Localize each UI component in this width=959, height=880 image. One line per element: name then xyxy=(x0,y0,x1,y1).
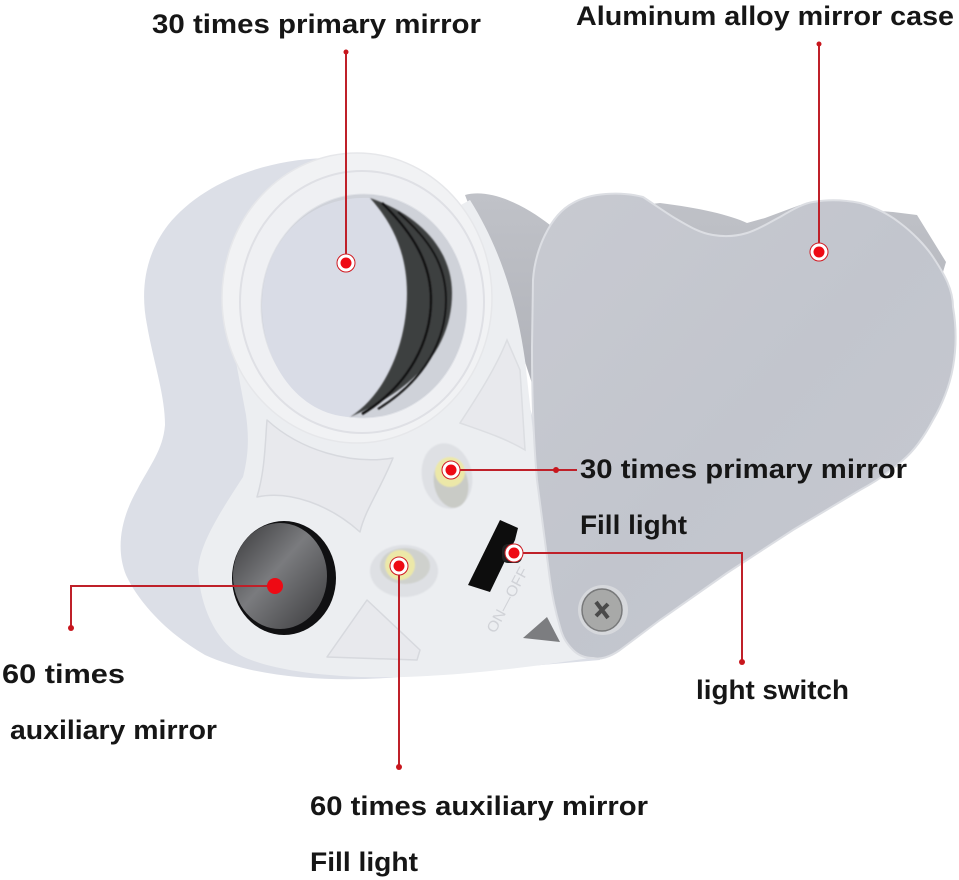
callout: 30 times primary mirror: 30 times primary mirror xyxy=(152,9,482,39)
callout: 60 times auxiliary mirror fill light: Fill light xyxy=(310,847,418,877)
callout: 30 times primary mirror fill light xyxy=(442,454,908,540)
small lens xyxy=(232,521,336,635)
ON OFF marking: ON—OFF xyxy=(484,564,532,636)
callout: light switch: light switch xyxy=(696,675,849,705)
switch knob xyxy=(502,544,522,563)
icon: magnifier xyxy=(121,153,956,679)
lens opening xyxy=(261,194,467,418)
dark barrel crescent xyxy=(350,198,452,417)
callout: 30 times primary mirror fill light: Fill light xyxy=(580,510,687,540)
back plate and case hinge xyxy=(465,193,946,470)
callout: light switch xyxy=(505,544,849,705)
LED lower xyxy=(370,545,438,597)
raised panels xyxy=(257,420,393,532)
side lobes of the body xyxy=(121,158,600,679)
callout: aluminum alloy mirror case xyxy=(576,1,954,261)
screw xyxy=(578,585,628,635)
callout: 30 times primary mirror fill light: 30 times primary mirror xyxy=(580,454,908,484)
switch xyxy=(468,520,518,592)
callout: 60 times auxiliary mirror fill light: 60 times auxiliary mirror xyxy=(310,791,649,821)
front plate xyxy=(198,200,590,677)
callout: aluminum alloy mirror case: Aluminum alloy mirror case xyxy=(576,1,954,31)
mirror case xyxy=(532,194,956,659)
lens ring xyxy=(222,153,492,443)
callout: 60 times auxiliary mirror xyxy=(2,578,283,745)
main lens glass xyxy=(262,198,407,417)
callout: 60 times auxiliary mirror fill light xyxy=(310,557,649,877)
callout: 60 times auxiliary mirror: auxiliary mirror xyxy=(10,715,218,745)
ring groove xyxy=(240,171,484,433)
callout: 60 times auxiliary mirror: 60 times xyxy=(2,659,125,689)
LED upper xyxy=(416,439,478,513)
hinge wedge xyxy=(523,617,560,642)
callout: 30 times primary mirror xyxy=(152,9,482,272)
